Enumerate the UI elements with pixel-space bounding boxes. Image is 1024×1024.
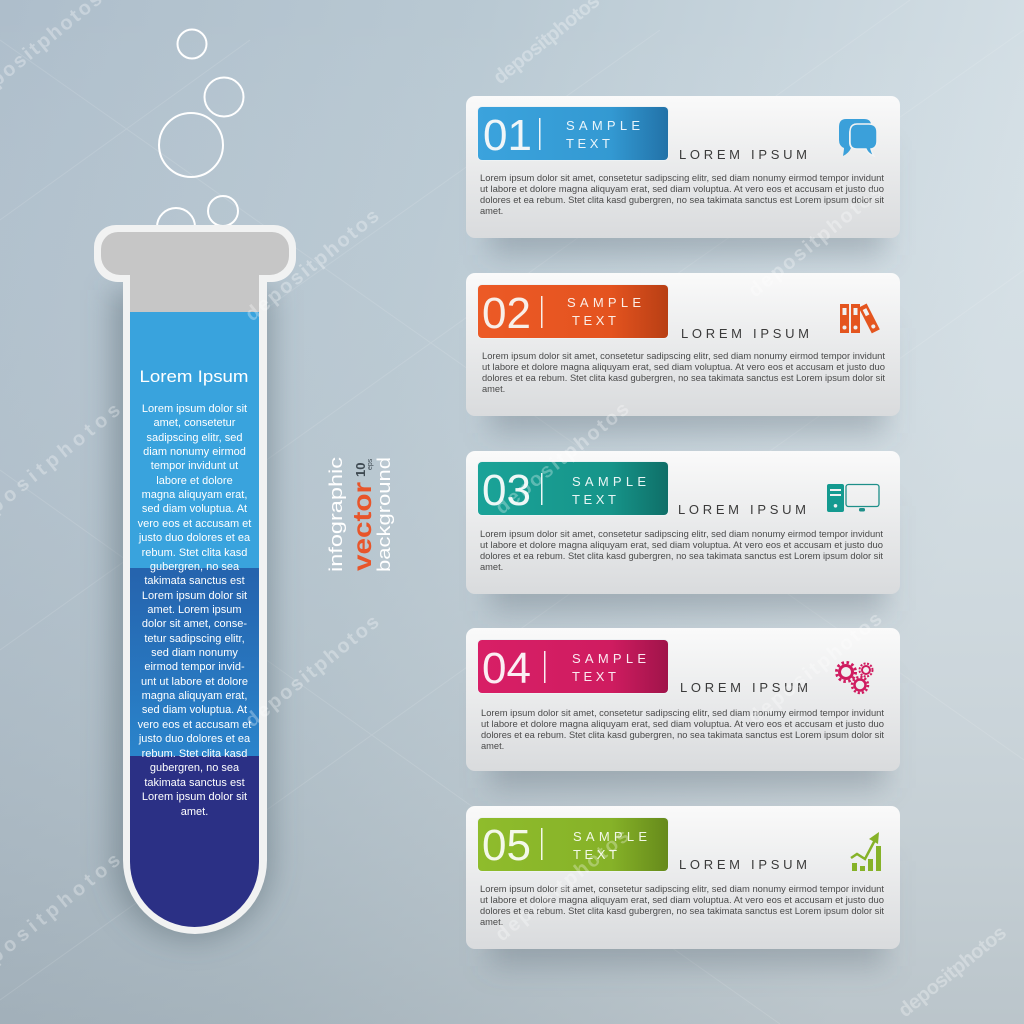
panel body text: amet. [480, 917, 503, 927]
panel body text: dolores et ea rebum. Stet clita kasd gubergren, no sea takimata sanctus est Lorem ipsum dolor sit [480, 551, 883, 561]
tube body text: labore et dolore [156, 475, 233, 487]
tube body text: Lorem ipsum dolor sit [142, 403, 247, 415]
panel body text: ut labore et dolore magna aliquyam erat, sed diam voluptua. At vero eos et accusam et justo duo [480, 184, 884, 194]
panel 1 [466, 96, 900, 255]
icon: binders [840, 303, 880, 333]
panel 3 [466, 451, 900, 611]
panel 5: TEXT [573, 847, 617, 862]
vertical logo text: background [374, 457, 394, 572]
tube body text: amet, consetetur [154, 417, 236, 429]
tube cap interior [101, 232, 289, 314]
tube body text: sed diam voluptua. At [142, 704, 247, 716]
tube body text: Lorem ipsum dolor sit [142, 590, 247, 602]
badge 02 [477, 284, 669, 339]
tube body text: Lorem ipsum dolor sit [142, 791, 247, 803]
watermark: depositphotos [241, 611, 383, 732]
tube body text: tempor invidunt ut [151, 460, 238, 472]
tube body text: dolor sit amet, conse- [142, 618, 247, 630]
badge label: SAMPLE [566, 118, 640, 133]
panel body text: ut labore et dolore magna aliquyam erat, sed diam voluptua. At vero eos et accusam et justo duo [480, 895, 884, 905]
panel body text: amet. [482, 384, 505, 394]
tube body text: vero eos et accusam et [138, 719, 251, 731]
tube heading: Lorem Ipsum [140, 368, 248, 386]
tube body text: vero eos et accusam et [138, 518, 251, 530]
panel body text: dolores et ea rebum. Stet clita kasd gubergren, no sea takimata sanctus est Lorem ipsum dolor sit [482, 373, 885, 383]
liquid: dark band [130, 756, 259, 927]
bubbles [157, 30, 244, 246]
number: 05 [482, 821, 531, 870]
liquid: light band [130, 312, 259, 568]
panel body text [480, 529, 883, 572]
tube body text: takimata sanctus est [144, 575, 245, 587]
vertical logo text: eps [367, 458, 374, 470]
tube body text: magna aliquyam erat, [142, 489, 247, 501]
icon: gears [836, 662, 872, 693]
panel 2: TEXT [572, 313, 616, 328]
tube body text: diam nonumy eirmod [143, 446, 246, 458]
vertical logo text [326, 457, 394, 572]
tube body text: amet. Lorem ipsum [147, 604, 242, 616]
panel body text: amet. [480, 206, 503, 216]
watermark: depositphotos [491, 825, 633, 946]
badge 04 [477, 639, 669, 694]
number: 03 [482, 466, 531, 515]
test tube [94, 225, 296, 940]
icon: speech bubbles [839, 119, 877, 156]
panel body text: Lorem ipsum dolor sit amet, consetetur sadipscing elitr, sed diam nonumy eirmod tempor invidunt [480, 173, 884, 183]
panel body text [480, 173, 884, 216]
watermark: depositphotos [744, 181, 886, 302]
panel body text: amet. [480, 562, 503, 572]
vertical logo text: vector [347, 482, 377, 571]
tube body text: justo duo dolores et ea [138, 733, 251, 745]
number: 01 [483, 111, 532, 160]
watermark: depositphotos [241, 205, 383, 326]
panel heading: LOREM IPSUM [678, 502, 806, 517]
panel body text [481, 708, 884, 751]
badge label: SAMPLE [572, 651, 646, 666]
panel 4: TEXT [572, 669, 616, 684]
tube shadow [112, 290, 272, 940]
icon: growth chart [851, 832, 881, 871]
panel body text: Lorem ipsum dolor sit amet, consetetur sadipscing elitr, sed diam nonumy eirmod tempor invidunt [482, 351, 885, 361]
panel body text: Lorem ipsum dolor sit amet, consetetur sadipscing elitr, sed diam nonumy eirmod tempor invidunt [480, 884, 884, 894]
panel body text: dolores et ea rebum. Stet clita kasd gubergren, no sea takimata sanctus est Lorem ipsum dolor sit [480, 906, 884, 916]
tube body text: amet. [181, 806, 208, 818]
watermark: depositphotos [491, 398, 633, 519]
panel body text: ut labore et dolore magna aliquyam erat, sed diam voluptua. At vero eos et accusam et justo duo [481, 719, 884, 729]
panel body text: dolores et ea rebum. Stet clita kasd gubergren, no sea takimata sanctus est Lorem ipsum dolor sit [481, 730, 884, 740]
panel 5 [466, 806, 900, 966]
panel heading: LOREM IPSUM [679, 147, 807, 162]
badge 01 [477, 106, 669, 161]
tube body text: sed diam voluptua. At [142, 503, 247, 515]
tube body text: rebum. Stet clita kasd [142, 748, 247, 760]
tube body text: unt ut labore et dolore [141, 676, 248, 688]
vertical logo text: 10 [353, 463, 368, 477]
number: 02 [482, 289, 531, 338]
tube body text: gubergren, no sea [150, 762, 240, 774]
watermark: depositphotos [894, 922, 1011, 1022]
badge label: SAMPLE [567, 295, 641, 310]
panel body text: amet. [481, 741, 504, 751]
panel body text: dolores et ea rebum. Stet clita kasd gubergren, no sea takimata sanctus est Lorem ipsum dolor sit [480, 195, 884, 205]
tube body text: takimata sanctus est [144, 777, 245, 789]
panel body text [480, 884, 884, 927]
panel 2 [466, 273, 900, 433]
panel body text: Lorem ipsum dolor sit amet, consetetur sadipscing elitr, sed diam nonumy eirmod tempor invidunt [480, 529, 883, 539]
tube body text: rebum. Stet clita kasd [142, 547, 247, 559]
tube body text: sadipscing elitr, sed [146, 432, 242, 444]
badge 05 [477, 817, 669, 872]
vertical logo text: infographic [326, 457, 346, 572]
panel body text: Lorem ipsum dolor sit amet, consetetur sadipscing elitr, sed diam nonumy eirmod tempor invidunt [481, 708, 884, 718]
panel heading: LOREM IPSUM [681, 326, 809, 341]
panel body text: ut labore et dolore magna aliquyam erat, sed diam voluptua. At vero eos et accusam et justo duo [480, 540, 883, 550]
tube body text: gubergren, no sea [150, 561, 240, 573]
panel body text [482, 351, 885, 394]
tube body text: justo duo dolores et ea [138, 532, 251, 544]
badge label: SAMPLE [573, 829, 647, 844]
tube body text: magna aliquyam erat, [142, 690, 247, 702]
badge 03 [477, 461, 669, 516]
tube glass outline [94, 225, 296, 934]
badge label: SAMPLE [572, 474, 646, 489]
icon: computer [827, 484, 879, 512]
tube body text [138, 403, 251, 818]
panel body text: ut labore et dolore magna aliquyam erat, sed diam voluptua. At vero eos et accusam et justo duo [482, 362, 885, 372]
liquid: middle band [130, 568, 259, 756]
number: 04 [482, 644, 531, 693]
panel heading: LOREM IPSUM [679, 857, 807, 872]
tube body text: sed diam nonumy [151, 647, 238, 659]
watermark: depositphotos [744, 608, 886, 729]
panel 3: TEXT [572, 492, 616, 507]
tube body text: tetur sadipscing elitr, [144, 633, 245, 645]
panel heading: LOREM IPSUM [680, 680, 808, 695]
tube body text: eirmod tempor invid- [144, 661, 245, 673]
panel 1: TEXT [566, 136, 610, 151]
panel 4 [466, 628, 900, 788]
